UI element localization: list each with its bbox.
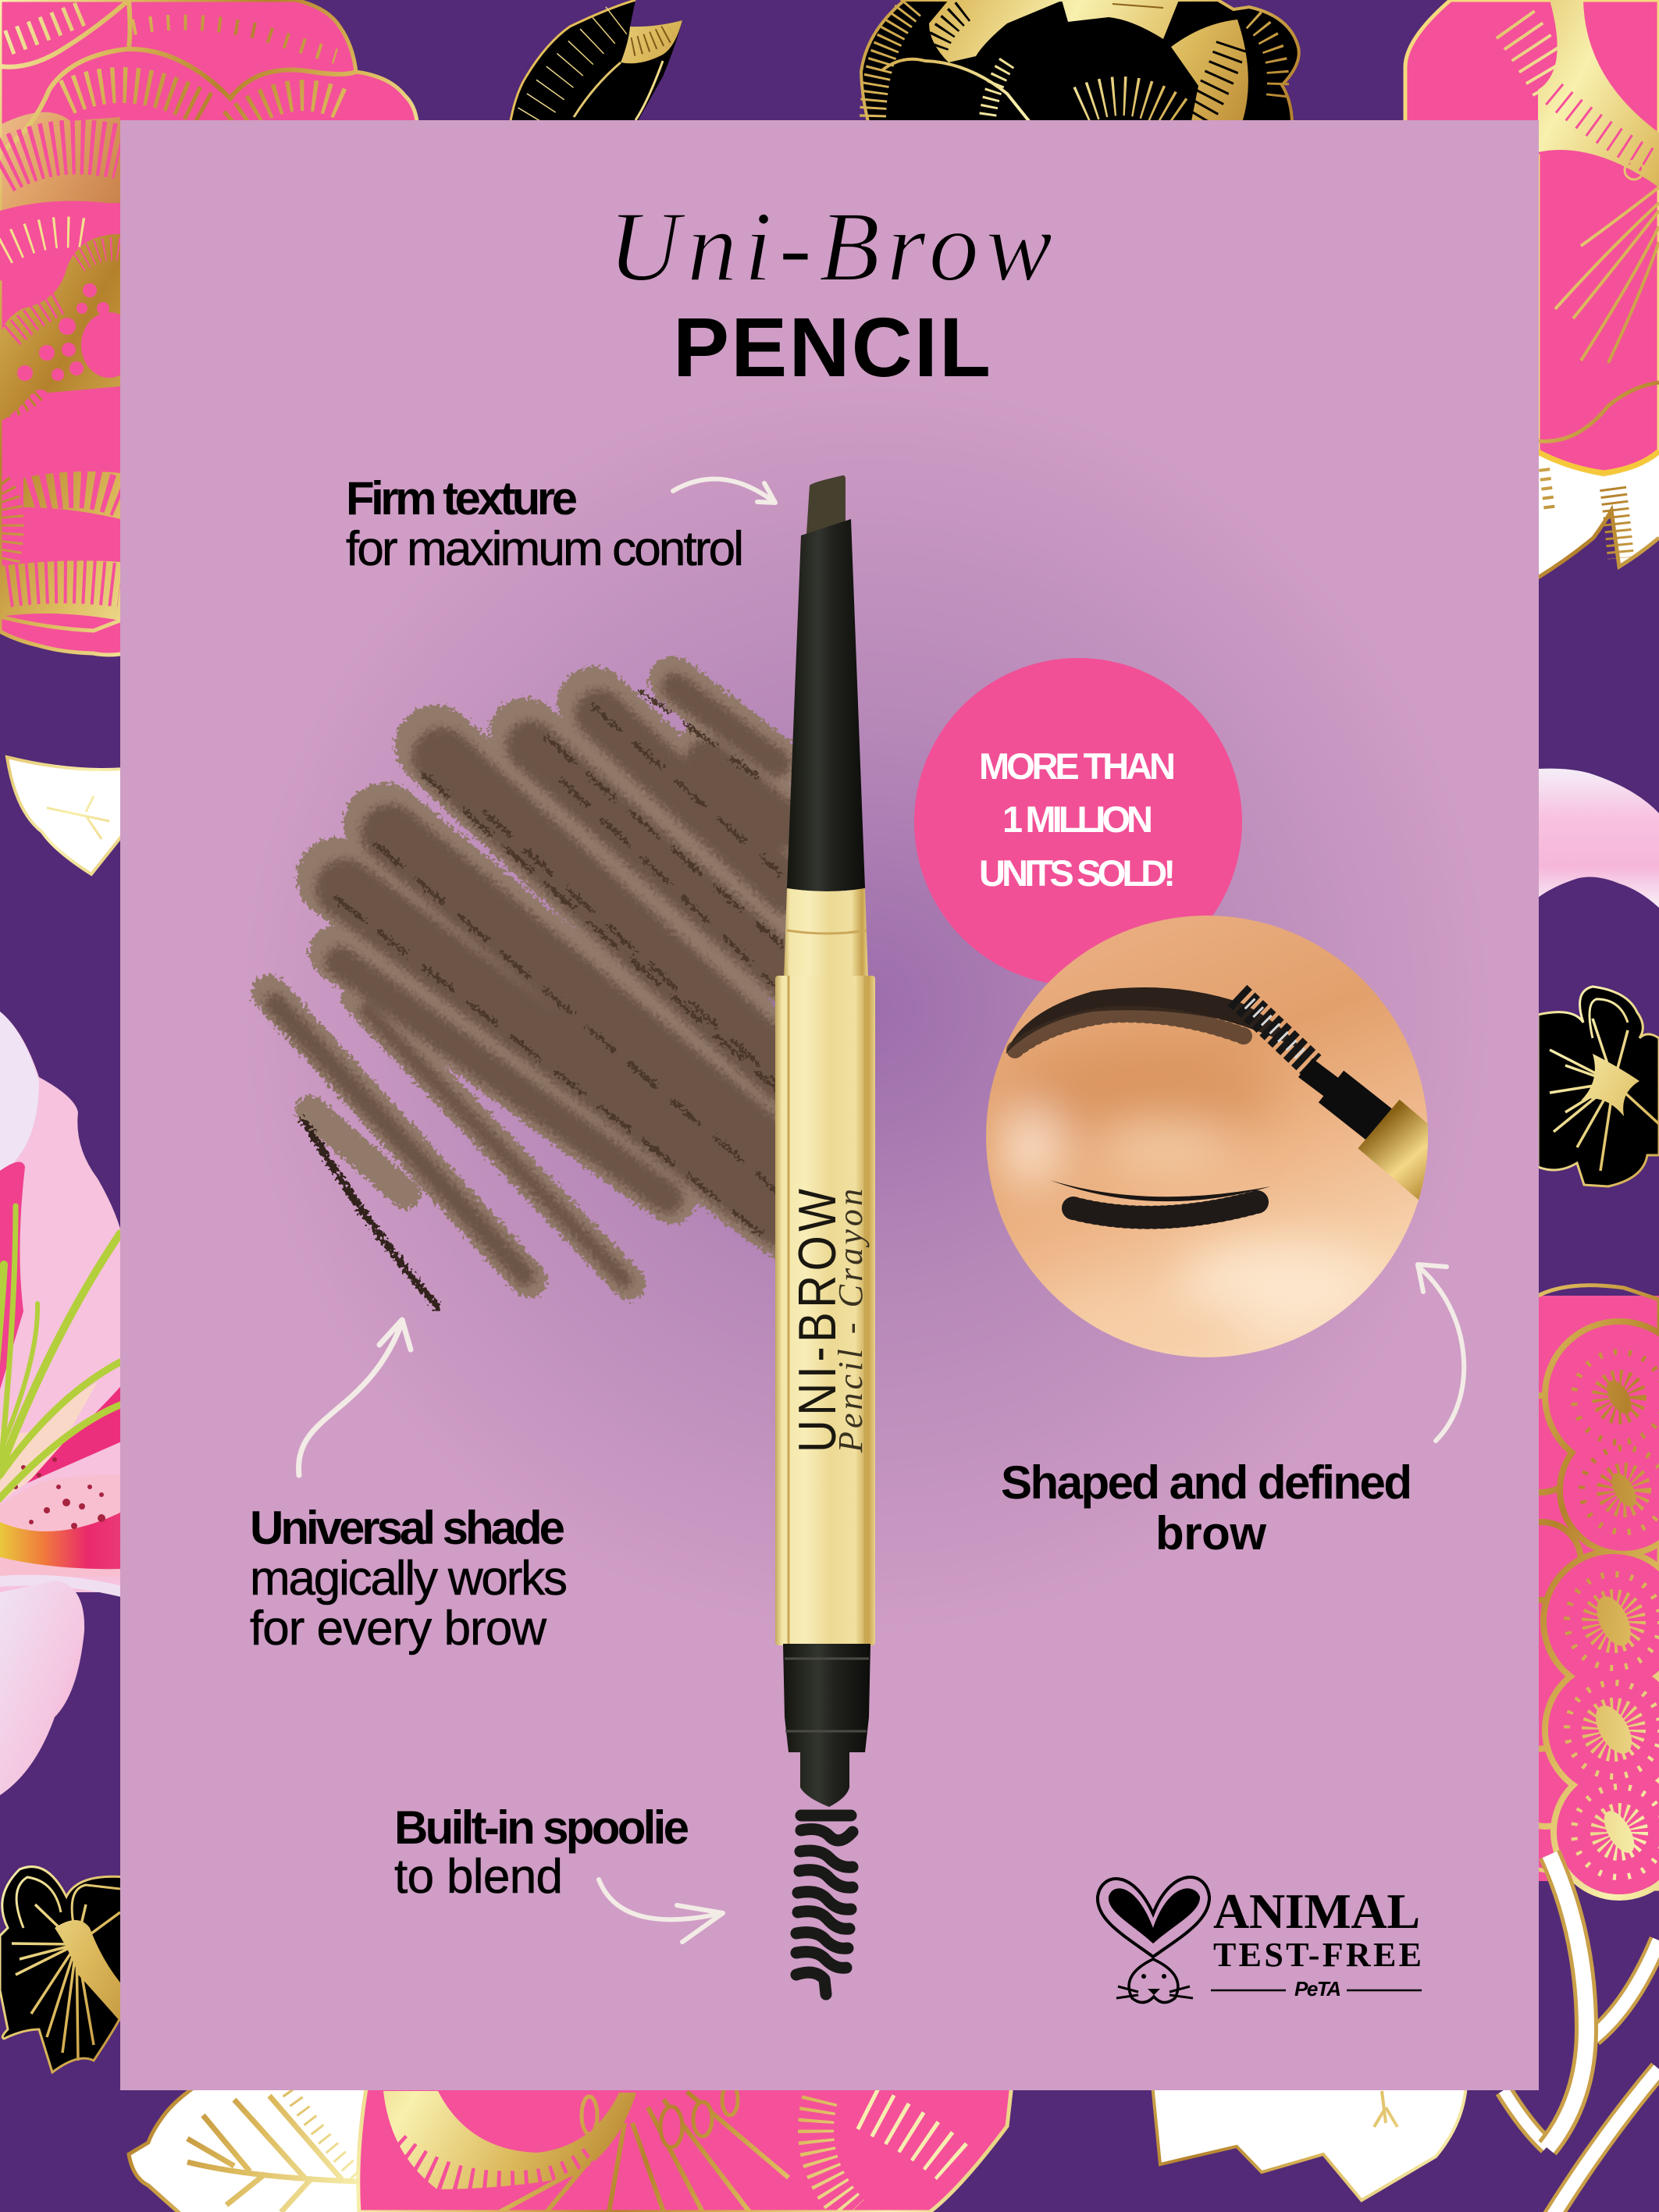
callout: shaped and defined brow: Shaped and defined [1001,1456,1412,1509]
floral: bottom pink flower [358,2084,1012,2212]
pencil product [775,475,875,1994]
floral: left black and gold flower [0,1867,125,2072]
callout: shaped and defined brow [1001,1456,1412,1559]
floral: top-right pink flower with white leaves [1405,0,1659,578]
callout: universal shade [250,1502,568,1655]
eyelashes [1050,1180,1271,1218]
barrel label: Pencil - Crayon [831,1189,870,1453]
arrow: to spoolie [599,1879,723,1942]
callout: firm texture: for maximum control [346,522,744,576]
PETA animal test-free logo: PeTA [1294,1977,1341,2000]
floral: left white petal [7,757,125,874]
title: Uni-Brow [608,191,1052,302]
floral: right pink flower cluster [1491,1286,1659,1897]
floral: right black and gold flower [1538,987,1659,1186]
floral: top black leaf [510,0,682,125]
eyebrow [1006,987,1302,1054]
barrel label: UNI-BROW [789,1188,847,1453]
spoolie brush [796,1815,853,1994]
arrow: to swatch [299,1320,411,1475]
floral: top-left pink flower [0,0,418,655]
pencil lead tip [806,475,846,534]
PETA animal test-free logo: TEST-FREE [1213,1936,1422,1974]
floral: bottom-left white leaf [129,2084,375,2212]
callout: built-in spoolie [394,1801,689,1904]
callout: universal shade: Universal shade [250,1502,565,1554]
stat badge: more than 1 million units sold: 1 MILLION [1002,798,1153,840]
arrow: to photo [1418,1264,1464,1441]
icon: bunny heart [1098,1877,1209,2003]
spoolie in use [1237,995,1452,1186]
gold collar [784,888,868,979]
black upper section [787,519,865,891]
title: PENCIL [673,300,991,394]
black lower cap [783,1644,870,1807]
title [608,191,1052,394]
main lilac panel [120,120,1539,2090]
stat badge: more than 1 million units sold: MORE THAN [979,745,1176,787]
arrow: to pencil tip [673,479,775,503]
callout: firm texture: Firm texture [346,472,578,525]
callout: firm texture [346,472,744,576]
floral: bottom-right white leaf [1152,2084,1466,2200]
brow pencil swatch [269,681,792,1307]
floral: left lily [0,1012,125,1795]
floral: right lily petal [1538,769,1659,908]
floral: top-centre black and gold flower [861,0,1299,125]
stat badge: more than 1 million units sold: UNITS SOLD! [979,852,1176,894]
floral: white stems [1504,1855,1659,2212]
callout: shaped and defined brow: brow [1155,1507,1266,1559]
stat badge: more than 1 million units sold [914,658,1242,986]
PETA animal test-free logo: ANIMAL [1213,1883,1420,1939]
callout: universal shade: magically works [250,1552,568,1606]
photo: shaped brow and closed eye [984,913,1452,1360]
callout: universal shade: for every brow [250,1602,546,1655]
PETA animal test-free logo [1098,1877,1422,2003]
gold barrel [775,976,875,1645]
callout: built-in spoolie: Built-in spoolie [394,1801,689,1854]
callout: built-in spoolie: to blend [394,1850,563,1904]
